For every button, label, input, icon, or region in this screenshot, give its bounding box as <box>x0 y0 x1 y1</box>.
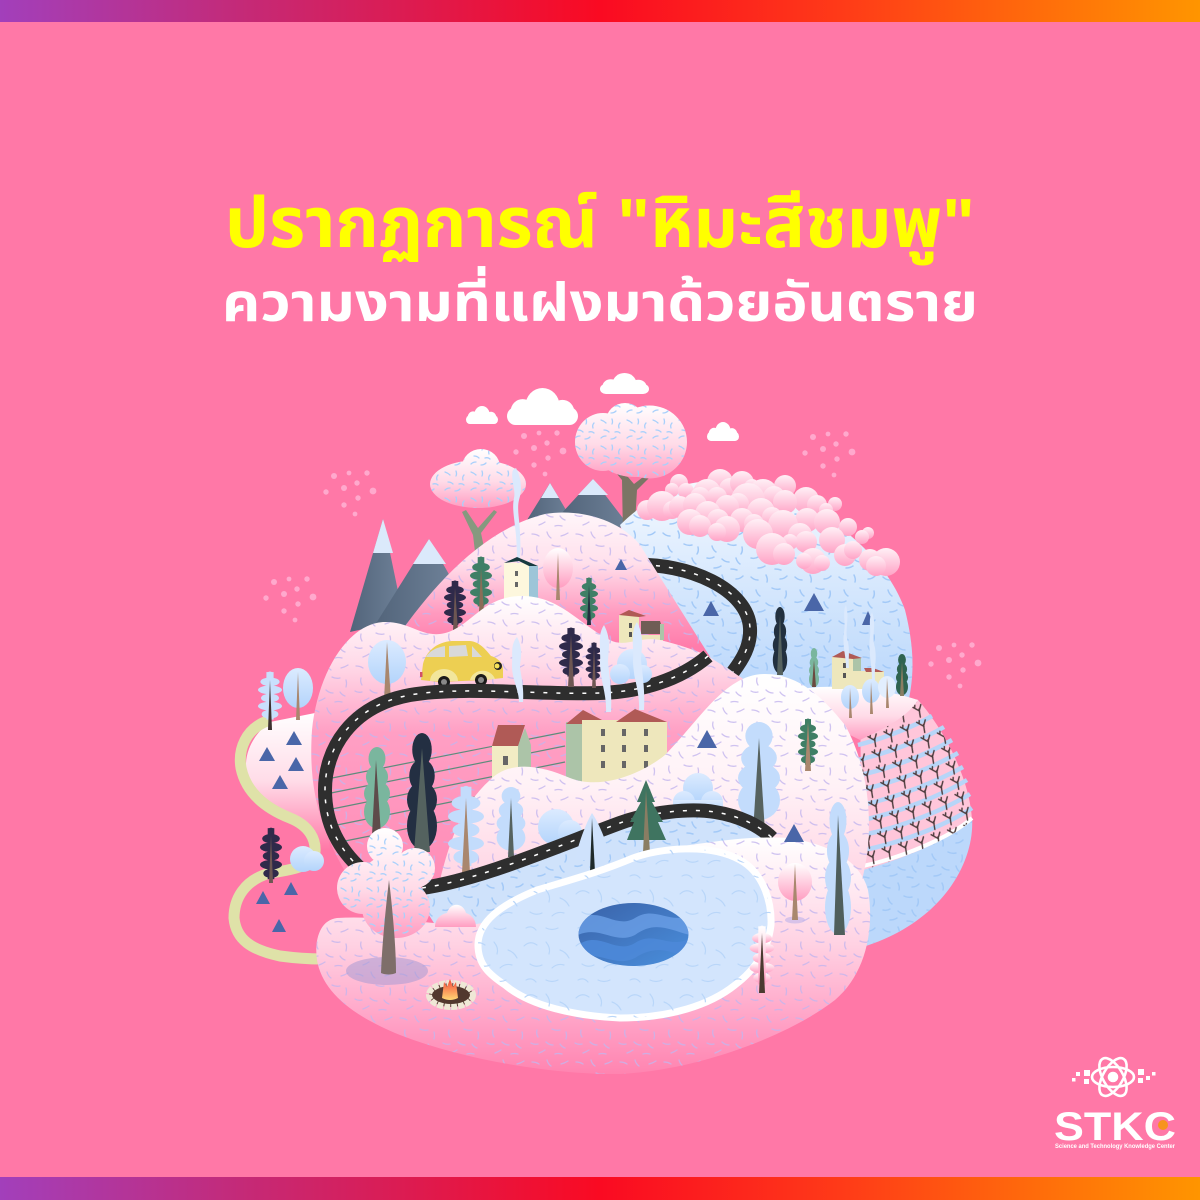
pink snow puffs <box>637 469 900 576</box>
title <box>222 184 978 333</box>
vineyard dome <box>858 699 972 870</box>
house five <box>832 651 884 689</box>
campfire <box>429 979 473 1007</box>
pixel squares <box>1072 1069 1156 1084</box>
pink tree left canopy <box>430 449 526 508</box>
pink round tree <box>778 863 812 924</box>
pink round tree <box>543 548 573 600</box>
yellow car <box>420 641 503 688</box>
back mountains <box>527 479 632 530</box>
winding cream path <box>234 720 322 959</box>
green small tree <box>580 577 598 625</box>
right hill small trees <box>809 648 908 718</box>
apartment building <box>566 709 667 795</box>
top gradient bar <box>0 0 1200 22</box>
hill tree round blue <box>368 640 406 700</box>
bottom gradient bar <box>0 1177 1200 1200</box>
snow bush <box>610 649 652 684</box>
big foreground tree <box>337 828 435 985</box>
title line 2: ความงามที่แฝงมาด้วยอันตราย <box>222 266 978 333</box>
white triangle tree <box>575 813 610 872</box>
left loop snowy patch <box>246 712 330 850</box>
fence lines <box>331 732 565 841</box>
lake <box>478 849 771 1018</box>
small right hill <box>808 687 918 740</box>
pink mound <box>435 905 476 927</box>
back hill trees <box>444 548 627 630</box>
vineyard bowl <box>858 818 972 946</box>
foreground lake trees <box>750 802 851 993</box>
blue snowy hill <box>620 482 912 720</box>
title line 1: ปรากฏการณ์ "หิมะสีชมพู" <box>225 184 975 265</box>
house one <box>504 557 538 600</box>
pink tree right trunk <box>617 474 651 540</box>
STKC logo <box>1054 1054 1176 1150</box>
pond <box>578 903 690 967</box>
light leafy tree <box>258 672 282 730</box>
light round tree <box>283 668 313 720</box>
top road <box>630 565 750 672</box>
small triangle tree <box>615 559 627 570</box>
pink leafy tree <box>750 926 774 993</box>
foreground hill <box>316 837 870 1074</box>
decorative snow dots <box>263 430 981 688</box>
dark leafy tree <box>260 828 282 883</box>
centre white hill <box>440 674 869 900</box>
left hill <box>311 596 760 900</box>
road side trees <box>575 780 666 872</box>
back pink hill <box>395 512 712 680</box>
house three <box>492 725 531 785</box>
mid hill dark trees <box>559 628 652 688</box>
dark leafy tree <box>444 580 466 630</box>
house two <box>619 610 664 644</box>
lake body <box>478 849 771 1018</box>
wordmark: STKC <box>1054 1105 1176 1149</box>
blue hill triangle trees and cypress <box>703 593 874 675</box>
light leafy tree <box>448 786 484 873</box>
tall blue tree <box>738 722 780 832</box>
pink tree right canopy <box>575 403 687 478</box>
triangles on loop <box>256 731 304 932</box>
centre hill trees <box>448 719 818 873</box>
green tree <box>798 719 818 771</box>
smoke over buildings <box>512 622 644 712</box>
blue tree <box>497 787 525 857</box>
white clouds <box>466 373 739 441</box>
pink tree left trunk <box>462 510 497 552</box>
blue triangle tree <box>697 730 717 748</box>
smoke from house one <box>512 468 521 558</box>
left mountains <box>350 519 455 640</box>
orange dot <box>1158 1120 1168 1130</box>
green leafy tree <box>470 557 492 612</box>
navy tree <box>407 733 437 852</box>
lake ripples <box>478 849 771 1018</box>
left meadow trees <box>256 668 324 932</box>
bush <box>538 809 582 845</box>
snow bush <box>673 773 723 813</box>
lower road <box>422 810 772 888</box>
smoke from house five <box>843 605 876 680</box>
blue lower field <box>415 809 800 980</box>
atom mark <box>1092 1054 1134 1100</box>
green fir <box>627 780 666 853</box>
teal tree <box>364 747 390 835</box>
main road <box>325 656 708 870</box>
tagline: Science and Technology Knowledge Center <box>1055 1144 1176 1150</box>
small snow bush <box>290 846 324 872</box>
blue triangle tree <box>784 824 804 842</box>
tall blue tree <box>825 802 851 935</box>
